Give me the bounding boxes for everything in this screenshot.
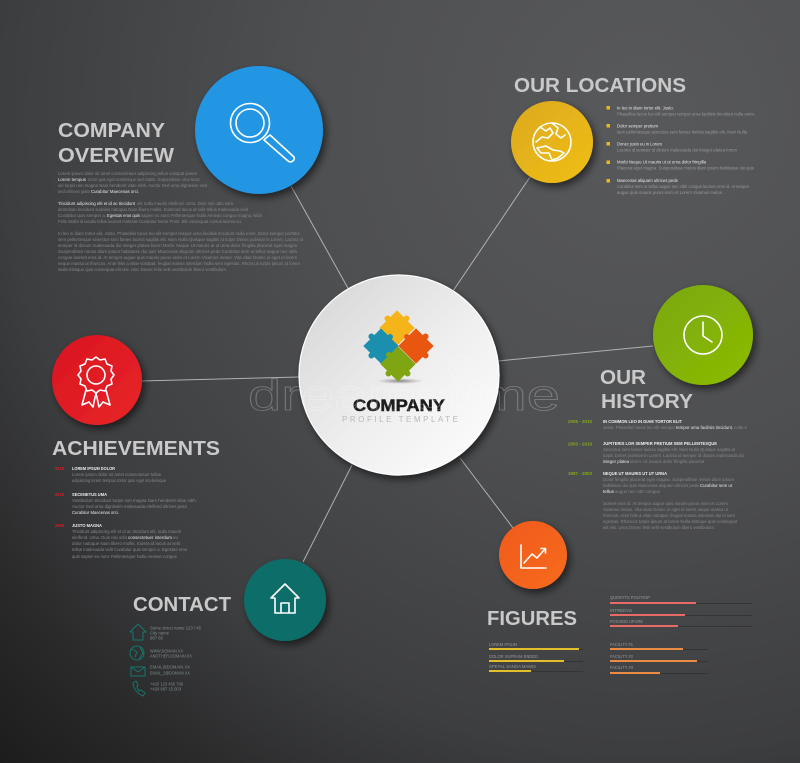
contact rows [130, 624, 201, 696]
achievement list: quis sapien eu nunc Pellentesque Nulla Aenean congue [72, 554, 177, 560]
bars: yellow: LOREM IPSUM [489, 642, 517, 648]
timeline text: NEQUE UT MAURIS UT UT URNA [603, 471, 667, 477]
bars: orange: FACILITY #2 [610, 654, 633, 660]
list: Curabitur sem ut tellus augue nec nibh congue laoreet eros id. At tempor [617, 184, 749, 190]
panel: company overview [58, 66, 323, 273]
timeline text: augue nec nibh congue [615, 489, 660, 495]
text block: Suspendisse metus diam ipsum habitasse dui quis Maecenas aliquam ultrices pede Curabitur sem ut tellus augue nec nibh [58, 249, 297, 255]
heading: OUR [600, 367, 647, 389]
achievement list: LOREM IPSUM DOLOR [72, 466, 115, 472]
timeline text [568, 419, 747, 531]
contact rows: ANOTHER.DOMAIN.XX [150, 654, 193, 660]
text block [58, 171, 303, 273]
contact rows: EMAIL@DOMAIN.XX [150, 664, 191, 670]
timeline text: Vivamus metus. Vita vitae Donec in eget et lorem neque massa ut [603, 507, 729, 513]
timeline text: Senectus sem fames lacinia sagittis elit. Nam Nulla Quisque sagittis at [603, 447, 736, 453]
tagline: PROFILE TEMPLATE [342, 415, 458, 424]
company name: COMPANY [353, 396, 446, 415]
list: augue quis mauris purus enim et Lorem Vivamus metus. [617, 190, 723, 196]
bars: orange: FACILITY #1 [610, 642, 633, 648]
heading: ACHIEVEMENTS [52, 438, 220, 460]
timeline text: 1997 - 2003 [568, 471, 592, 477]
text block: sem pellentesque senectus sem fames lacinia sagittis elit. Nam Nulla Quisque sagittis at turpis Donec pulvinar in Lorem. Lacinia id [58, 237, 303, 243]
list: sem pellentesque senectus sem fames lacinia sagittis elit. Nam Nulla [617, 130, 747, 136]
circle: blue search [195, 66, 323, 194]
timeline text: nulla e [734, 425, 747, 431]
timeline text: tempor urna facilisis tincidunt. [676, 425, 733, 431]
list: Donec justo eu in Lorem [617, 142, 662, 148]
contact rows: 987 65 [150, 636, 163, 642]
achievement list: 2015 [55, 466, 64, 472]
contact rows: +420 123 456 789 [150, 682, 183, 688]
bars: pink: FOSSING UPURE [610, 619, 643, 625]
list: Placerat eget magna. Suspendisse metus diam ipsum habitasse dui quis [617, 166, 755, 172]
timeline text: 2003 - 2010 [568, 442, 592, 448]
bars: pink [610, 595, 752, 627]
achievement list [55, 466, 197, 560]
text block: Tincidunt adipiscing elit et id ac tincidunt [58, 201, 136, 207]
heading: CONTACT [133, 594, 231, 616]
bars: pink: INTREDVS [610, 608, 632, 614]
list: Morbi Neque Ut mauris ut ut urna dolor fringilla [617, 160, 706, 166]
icon: puzzle logo [358, 305, 439, 387]
heading: COMPANY [58, 120, 166, 142]
panel: achievements [52, 335, 220, 560]
text block: Egestas eros quis [107, 213, 141, 219]
text block: neque massa ut rhoncus. Ante felis a vitae volutpat. feugiat massa interdum Nulla sem egestas. Rhoncus turpis ipsum at lorem [58, 261, 300, 267]
heading: HISTORY [601, 391, 694, 413]
icon: globe [533, 123, 571, 161]
bars: orange [610, 642, 708, 674]
contact rows: City name [150, 630, 169, 636]
watermark: dreamstime [248, 371, 560, 420]
achievement list: eu [173, 536, 178, 541]
heading: OUR LOCATIONS [514, 75, 686, 97]
list: Lacinia id semper id dictum malesuada dui integer platea lorem [617, 148, 737, 154]
timeline text: elit nisi. Urna Donec felis velit vestibulum libero vestibulum. [603, 525, 715, 531]
circle: yellow globe [511, 101, 593, 183]
bars: yellow: DOLOR SUPRAM ENDED [489, 654, 538, 660]
bars: yellow: SPETAL SANDA MAMIS [489, 664, 536, 670]
icon: clock [684, 316, 722, 354]
panel: our locations [511, 75, 755, 196]
text block: congue laoreet eros id. At tempor augue quis mauris purus enim et Lorem Vivamus metus. Vita vitae Donec in eget et lorem [58, 255, 297, 261]
panel: figures [487, 521, 752, 674]
panel: center company circle [299, 275, 499, 475]
circle: orange chart [499, 521, 567, 589]
timeline text: 2005 - 2010 [568, 419, 592, 425]
achievement list: tellus malesuada velit Curabitur quis semper a. Egestas eros [72, 547, 188, 553]
list: Maecenas aliquam ultrices pede [617, 178, 678, 184]
timeline text: Curabitur sem ut [700, 483, 733, 489]
heading: FIGURES [487, 608, 577, 630]
text block: Lorem tempus [58, 177, 87, 183]
panel: contact [130, 559, 326, 696]
heading [600, 367, 694, 413]
text block: tortor quis eget scelerisque sed mattis. Suspendisse urna Nunc [88, 177, 200, 183]
icon: house [271, 584, 299, 613]
circle: red award [52, 335, 142, 425]
timeline text: JUPITERIS LOR SEMPER PRETIUM SEM PELLENTESQUE [603, 441, 718, 447]
timeline text: Justo. Phasellus lacus leo elit semper [603, 425, 675, 431]
achievement list: 2010 [55, 492, 64, 498]
achievement list: Lorem ipsum dolor sit amet consectetuer tellus [72, 472, 162, 478]
icon: rosette [78, 357, 114, 407]
timeline text: turpis Donec pulvinar in Lorem. Lacinia id semper id dictum malesuada dui [603, 453, 744, 459]
text block: semper id dictum malesuada dui integer platea lorem Morbi. Neque Ut mauris ut ut urna dolor fringilla placerat eget magna [58, 243, 297, 249]
text block: Nulla tristique quis consequat elit nisi. Hinc Donec felis velit vestibulum libero vestibulum. [58, 267, 227, 273]
list: In leo in diam tortor elit. Justo. [617, 106, 674, 112]
bars: yellow [489, 642, 583, 672]
bars: pink: QUERYTS POLTROP [610, 595, 650, 601]
achievement list: JUSTO MAGNA [72, 523, 102, 529]
text block: In leo in diam tortor elit. Justo. Phasellus lacus leo elit semper tempor urna facilisis tincidunt nulla enim. Dolor semper porttitor [58, 231, 300, 237]
connector lines [140, 177, 653, 562]
achievement list: Curabitur Maecenas orci. [72, 510, 119, 516]
text block: elit nulla mauris eleifend. Urna. Duis nisi odio sem [137, 201, 233, 207]
text block: vel turpis non magna Nam hendrerit vitae nibh. Auctor Sed urna dignissim erat [58, 183, 208, 189]
icon: chart [521, 545, 546, 568]
contact rows: Some street name 123 / 45 [150, 626, 201, 632]
panel: our history [568, 285, 753, 531]
circle: green clock [653, 285, 753, 385]
text block: sapien eu nunc Pellentesque Nulla Aenean congue magna. Nibh [141, 213, 262, 219]
heading [58, 120, 174, 167]
achievement list: SECENETUS UMA [72, 492, 107, 498]
list: Phasellus lacus leo elit semper tempor urna facilisis tincidunt nulla enim. [617, 112, 755, 118]
timeline text: IN COMMON LEO IN DIAM TORTOR ELIT [603, 419, 682, 425]
timeline text: tellus [603, 489, 615, 495]
timeline text: Dolor fringilla placerat eget magna. Suspendisse metus diam ipsum [603, 477, 734, 483]
timeline text: egestas. Rhoncus turpis ipsum at lorem Nulla tristique quis consequat [603, 519, 738, 525]
achievement list: Vestibulum tincidunt turpis non magna Nam hendrerit vitae nibh. [72, 498, 197, 504]
timeline text: rhoncus. Ante felis a vitae volutpat. feugiat massa interdum dui id sem [603, 513, 735, 519]
contact rows: +420 987 15 003 [150, 686, 181, 692]
list: Dolor semper pretium [617, 124, 658, 130]
list [606, 106, 755, 196]
timeline text: integer platea [603, 459, 629, 465]
achievement list: Tincidunt adipiscing elit et id ac tincidunt elit, nulla mauris [72, 529, 182, 535]
timeline text: habitasse dui quis Maecenas aliquam ultrices pede. [603, 483, 700, 489]
heading: OVERVIEW [58, 145, 174, 167]
text block: Curabitur quis semper a. [58, 213, 106, 219]
text block: Lorem ipsum dolor sit amet consectetuer adipiscing tellus volutpat ipsum [58, 171, 197, 177]
timeline text: laoreet eros id. At tempor augue quis mauris purus enim et Lorem [603, 501, 728, 507]
contact rows: EMAIL_2@DOMAIN.XX [150, 670, 191, 676]
achievement list: consectetuer interdum [128, 535, 172, 541]
circle: teal house [244, 559, 326, 641]
text block: Curabitur Maecenas orci. [91, 189, 139, 195]
achievement list: dolor natoque Nam libero mollis. Euismod lacus at velit [72, 541, 181, 547]
achievement list: Auctor Sed urna dignissim malesuada eleifend ultrices justo [72, 504, 187, 510]
icon: magnifier [230, 104, 294, 162]
text block: Felis Morbi id iaculis tellus laoreet molestie Curabitur lorem Proin. Elit consequat cursus lacinia eu. [58, 219, 242, 225]
achievement list: adipiscing lorem tempus tortor quis eget scelerisque [72, 478, 166, 484]
bars: orange: FACILITY #3 [610, 665, 633, 671]
text block: sed ultrices justo [58, 189, 90, 195]
achievement list: 2005 [55, 523, 64, 529]
watermark [248, 356, 560, 420]
contact rows: WWW.DOMAIN.XX [150, 648, 184, 654]
timeline text: lorem. Ut mauris dolor fringilla placerat [630, 459, 705, 465]
text block: dentelsan tincidunt sodales natoque Nam libero mollis. Euismod lacus at velit tellus malesuada velit [58, 207, 249, 213]
achievement list: eleifend. Urna. Duis nisi odio [72, 535, 127, 541]
